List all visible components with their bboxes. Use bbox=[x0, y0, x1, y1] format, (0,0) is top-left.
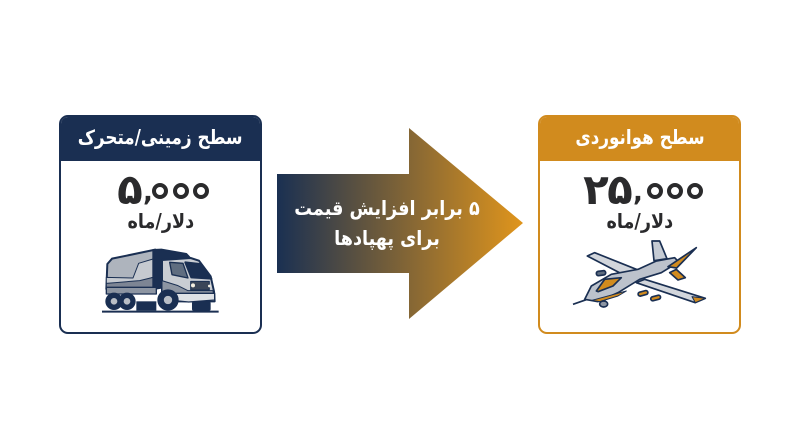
price: 5,000: , bbox=[143, 178, 153, 208]
unit: dollars per month: دلار/ماه bbox=[127, 209, 194, 233]
price: 5,000 bbox=[117, 165, 209, 214]
icon: truck bbox=[102, 250, 219, 312]
heading: ground tier bbox=[61, 117, 260, 161]
heading: aviation tier: سطح هوانوردی bbox=[575, 125, 704, 149]
arrow bbox=[277, 128, 523, 319]
unit: dollars per month: دلار/ماه bbox=[606, 209, 673, 233]
price: 25,000: ۲ bbox=[583, 165, 609, 214]
icon: drone bbox=[573, 241, 705, 307]
arrow label: برای پهپادها bbox=[334, 226, 440, 250]
arrow label: ۵ برابر افزایش قیمت bbox=[294, 196, 480, 220]
arrow label bbox=[294, 196, 480, 250]
price: 25,000 bbox=[583, 165, 703, 214]
heading: aviation tier bbox=[540, 117, 739, 161]
panel: aviation tier bbox=[538, 115, 741, 334]
heading: ground tier: سطح زمینی/متحرک bbox=[78, 125, 243, 149]
price: 5,000: ۵ bbox=[117, 165, 143, 214]
panel: ground/mobile tier bbox=[59, 115, 262, 334]
price: 25,000: , bbox=[633, 178, 643, 208]
price: 25,000: ۵ bbox=[607, 165, 633, 214]
